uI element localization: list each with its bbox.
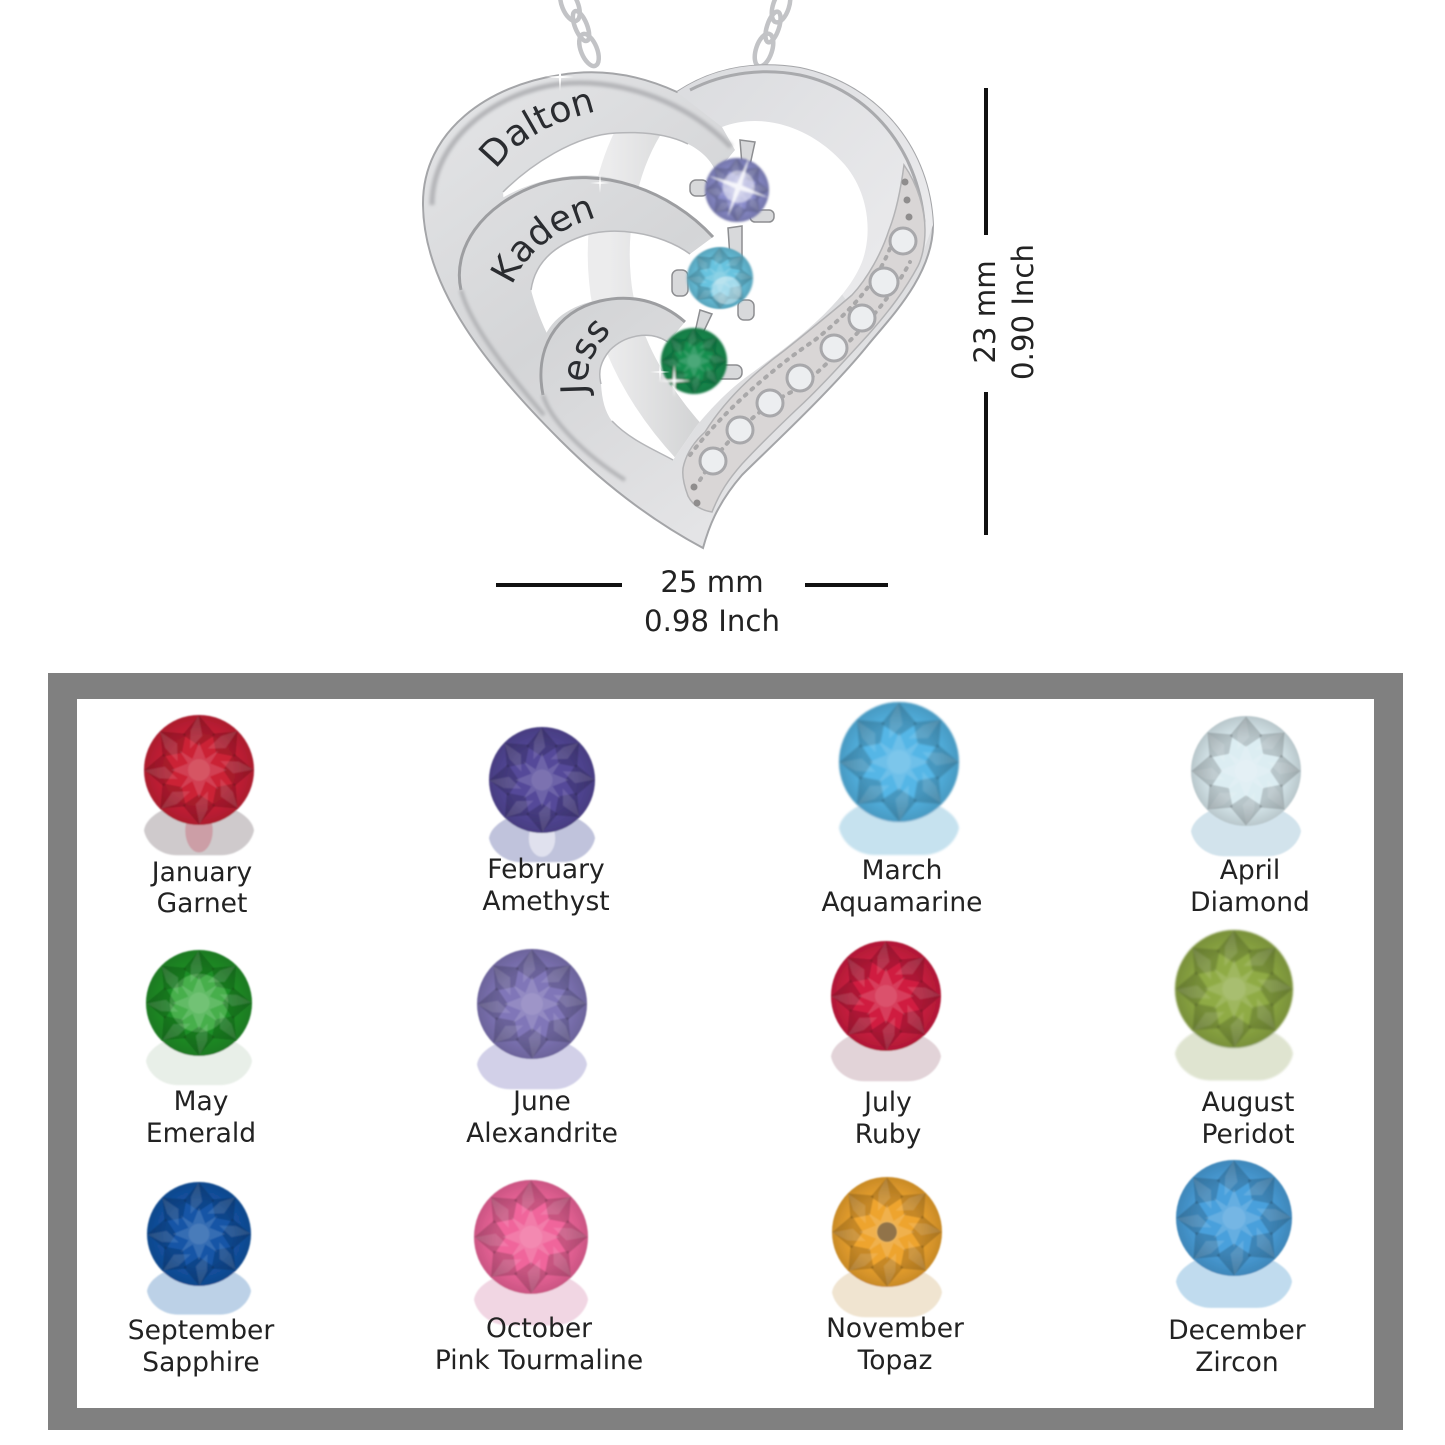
label: March Aquamarine: March (862, 855, 942, 886)
heart opening (503, 121, 868, 460)
stone: aqua (687, 247, 753, 309)
label: November Topaz: November (826, 1313, 964, 1344)
label: October Pink Tourmaline: October (486, 1313, 592, 1344)
prongs (672, 140, 774, 379)
label: August Peridot: Peridot (1201, 1119, 1295, 1150)
Kaden ribbon (457, 175, 713, 430)
pave band (683, 165, 925, 512)
gem: January garnet (144, 715, 254, 855)
dimension: width 25 mm / 0.98 Inch: 0.98 Inch (644, 604, 780, 638)
Kaden lower shadow (461, 290, 544, 415)
label: September Sapphire: September (128, 1315, 274, 1346)
Kaden edge (459, 178, 713, 290)
Jess ribbon (542, 298, 685, 495)
label: July Ruby: July (864, 1087, 912, 1118)
label: May Emerald: Emerald (146, 1118, 256, 1149)
sparkle highlights (546, 63, 670, 382)
gem: December zircon (1176, 1160, 1292, 1308)
label: December Zircon: Zircon (1195, 1347, 1279, 1378)
ribbon inner edges (503, 133, 690, 460)
gem: February amethyst (489, 727, 595, 862)
label: February Amethyst: February (487, 854, 605, 885)
gem: July ruby (831, 941, 941, 1081)
label: June Alexandrite: Alexandrite (466, 1118, 618, 1149)
engraved name: Dalton: Dalton (478, 94, 594, 167)
label: February Amethyst: Amethyst (482, 886, 610, 917)
dimension: height 23 mm / 0.90 Inch (968, 88, 1040, 535)
label: January Garnet: Garnet (157, 888, 247, 919)
label: November Topaz: Topaz (857, 1345, 932, 1376)
gem: August peridot (1175, 930, 1293, 1080)
gem: April diamond (1191, 716, 1301, 856)
label: April Diamond: Diamond (1190, 887, 1310, 918)
Jess edge (541, 298, 685, 395)
stone: periwinkle (698, 146, 780, 228)
Jess lower shadow (543, 395, 625, 480)
right lobe rim (690, 72, 924, 222)
right lobe face (677, 65, 933, 300)
label: October Pink Tourmaline: Pink Tourmaline (435, 1345, 643, 1376)
pave speckle (690, 240, 910, 480)
dimension: height 23 mm / 0.90 Inch: 0.90 Inch (1006, 244, 1040, 380)
gem: November topaz (832, 1177, 942, 1317)
gem: June alexandrite (477, 949, 587, 1089)
engraved name: Jess: Jess (560, 320, 608, 396)
label: December Zircon: December (1168, 1315, 1306, 1346)
gem: March aquamarine (839, 702, 959, 855)
heart body (423, 65, 933, 548)
engraved name: Kaden: Kaden (490, 200, 594, 282)
label: April Diamond: April (1220, 855, 1280, 886)
label: May Emerald: May (174, 1086, 228, 1117)
label: June Alexandrite: June (513, 1086, 571, 1117)
label: August Peridot: August (1202, 1087, 1294, 1118)
label: July Ruby: Ruby (855, 1119, 921, 1150)
dimension: height 23 mm / 0.90 Inch: 23 mm (968, 260, 1002, 364)
pave beads (690, 178, 912, 506)
pendant: silver heart with three engraved ribbons and birthstones (422, 64, 934, 550)
stone: emerald (658, 328, 727, 397)
back ring (609, 125, 692, 445)
chain: left and right necklace chains (556, 0, 794, 69)
label: September Sapphire: Sapphire (142, 1347, 260, 1378)
gem: May emerald (146, 950, 252, 1085)
Dalton ribbon bevel (432, 83, 731, 205)
gem: October pink tourmaline (474, 1180, 588, 1325)
gem: September sapphire (147, 1182, 251, 1315)
label: March Aquamarine: Aquamarine (822, 887, 982, 918)
dimension: width 25 mm / 0.98 Inch (496, 565, 888, 638)
label: January Garnet: January (152, 857, 252, 888)
dimension: width 25 mm / 0.98 Inch: 25 mm (660, 565, 764, 599)
panel: birthstone chart (48, 673, 1403, 1430)
pave stones (700, 228, 916, 474)
